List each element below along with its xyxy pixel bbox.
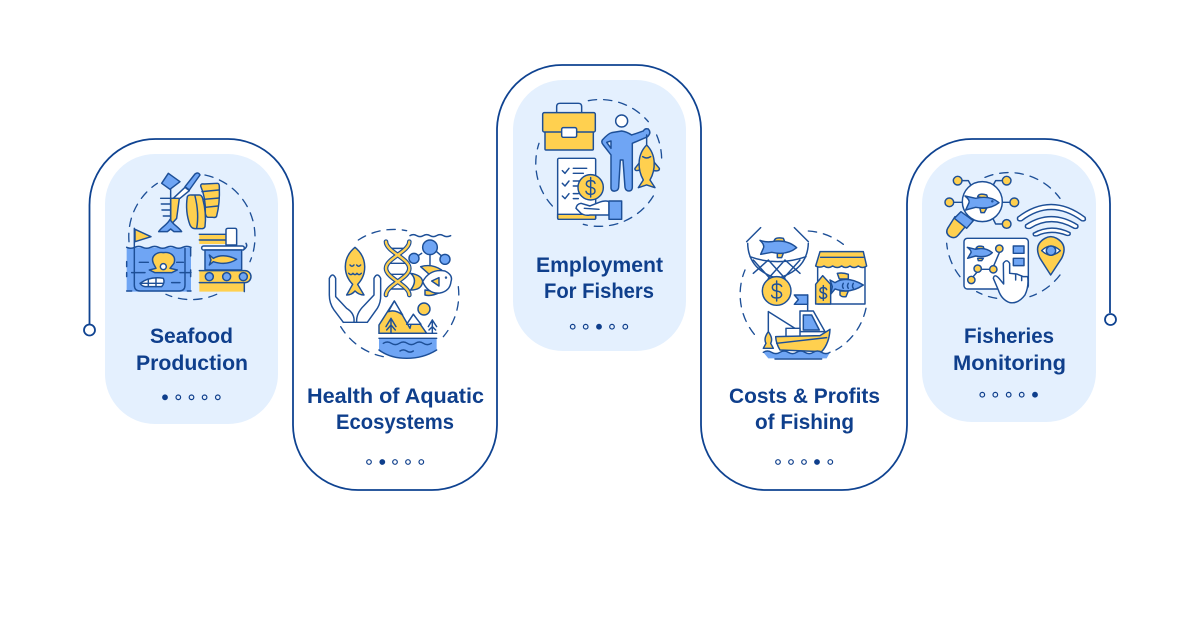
panel background [513, 80, 686, 351]
pagination dots [570, 324, 628, 329]
card: Health of Aquatic Ecosystems [307, 229, 484, 464]
heading line 2: Ecosystems [336, 411, 454, 434]
heading line 2: Production [136, 352, 248, 375]
heading line 2: Monitoring [953, 352, 1066, 375]
pagination dots [776, 460, 833, 464]
card: Seafood Production [105, 154, 278, 424]
heading line 2: For Fishers [544, 280, 654, 303]
card: Employment For Fishers [513, 80, 686, 351]
card: Costs and Profits of Fishing [729, 228, 880, 464]
pagination dots [980, 392, 1037, 397]
connecting outline [84, 65, 1116, 490]
heading: Fisheries [964, 325, 1054, 348]
pagination dots [163, 395, 220, 400]
panel background [105, 154, 278, 424]
panel background [922, 154, 1096, 422]
icon: costs and profits [740, 228, 867, 359]
pagination dots [367, 460, 424, 464]
icon: seafood production [127, 173, 255, 300]
icon: employment [536, 100, 662, 226]
heading: Employment [536, 254, 663, 277]
heading: Seafood [150, 325, 233, 348]
card: Fisheries Monitoring [922, 154, 1096, 422]
icon: aquatic ecosystems [329, 229, 459, 358]
heading line 2: of Fishing [755, 411, 854, 434]
icon: fisheries monitoring [945, 173, 1085, 303]
heading: Health of Aquatic [307, 385, 484, 408]
heading: Costs & Profits [729, 385, 880, 408]
